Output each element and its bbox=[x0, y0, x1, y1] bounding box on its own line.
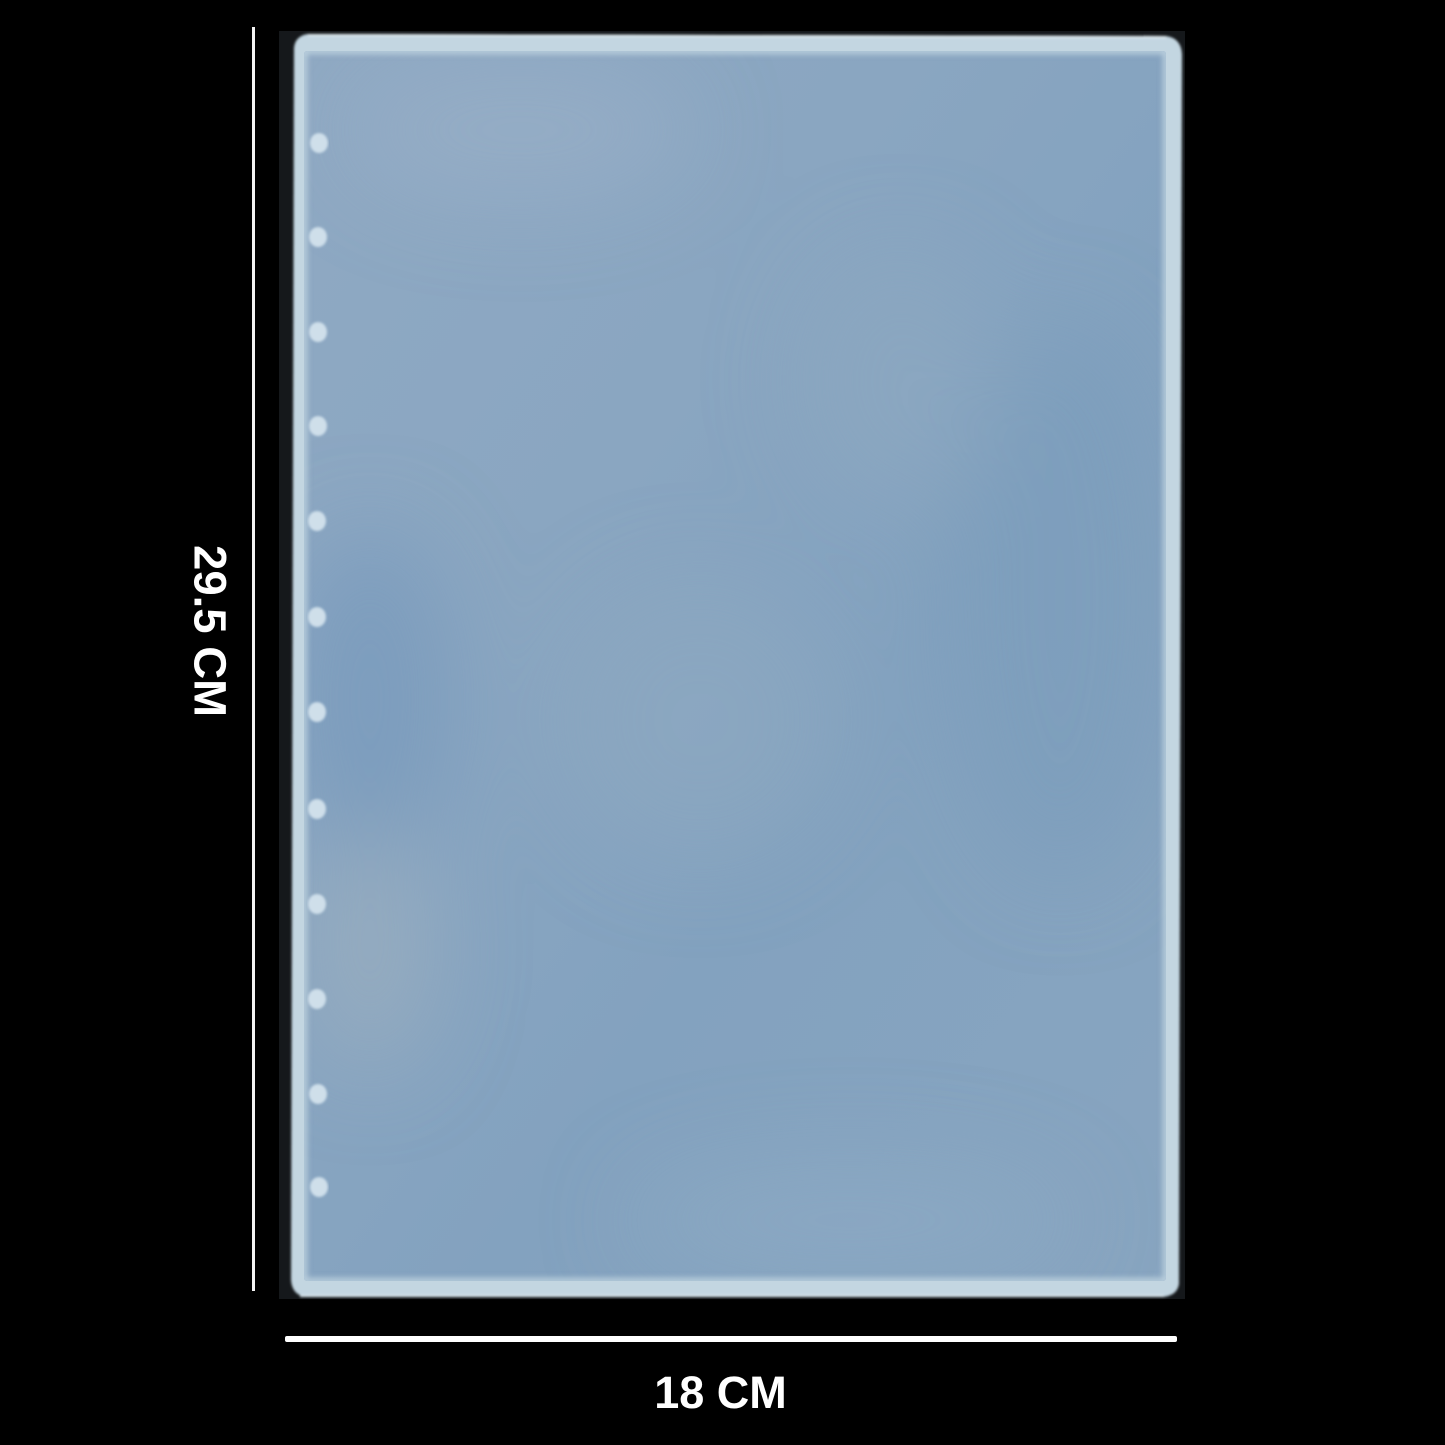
mould dark backing bbox=[279, 31, 1185, 1299]
height dimension line bbox=[252, 27, 255, 1291]
surface mottling bbox=[310, 557, 445, 1022]
mould rim bbox=[291, 34, 1182, 1297]
binder holes bbox=[308, 133, 328, 1197]
silicone mould bbox=[279, 31, 1185, 1299]
width label: 18 CM bbox=[654, 1367, 787, 1418]
height label: 29.5 CM bbox=[184, 545, 236, 717]
width dimension line bbox=[285, 1336, 1177, 1342]
mould inner surface bbox=[290, 51, 1170, 1281]
